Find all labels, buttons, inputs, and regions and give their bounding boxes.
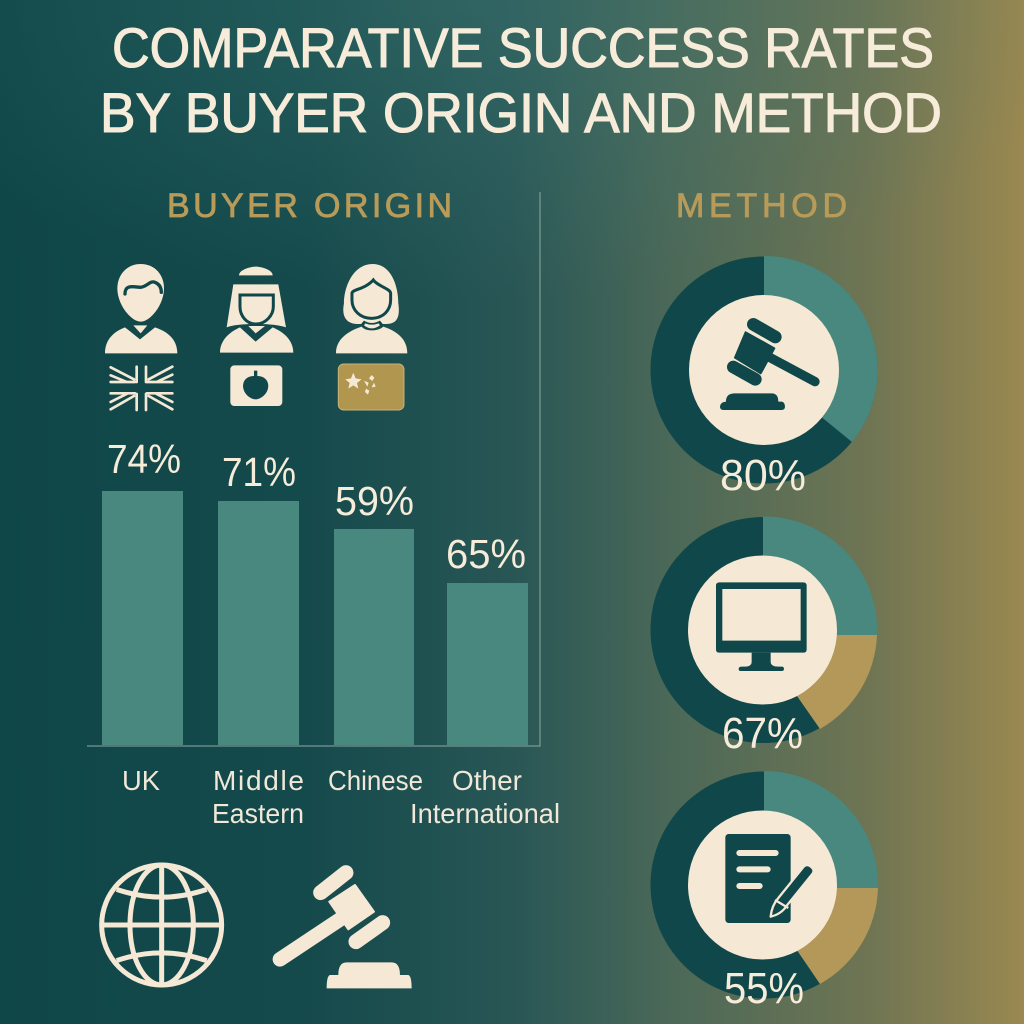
icon: gavel in circle [720, 324, 815, 410]
bar: UK [102, 491, 183, 745]
title: BY BUYER ORIGIN AND METHOD [100, 81, 942, 144]
bar values: 71% [222, 449, 296, 495]
bar category labels [122, 765, 560, 829]
donut: auction 80% [650, 256, 878, 500]
bar category labels: Eastern [212, 798, 304, 829]
bar category labels: UK [122, 765, 160, 796]
icon: Chinese flag [338, 364, 404, 410]
bar: Middle Eastern [218, 501, 299, 745]
icon: Chinese buyer [336, 264, 407, 353]
bar: Chinese [334, 529, 414, 745]
bar: Other International [447, 583, 528, 745]
icon: Middle Eastern flag [230, 365, 282, 406]
bar values: 65% [446, 531, 526, 577]
bar category labels: Chinese [328, 765, 423, 796]
icon: document and pen [725, 834, 814, 923]
icon: globe [102, 865, 222, 985]
icon: UK flag [111, 367, 172, 410]
heading: method: METHOD [676, 187, 847, 225]
bar category labels: International [410, 798, 560, 829]
value: 67% [722, 709, 803, 758]
title: COMPARATIVE SUCCESS RATES [112, 16, 934, 79]
bar values: 74% [107, 436, 181, 482]
icon: UK buyer [105, 264, 177, 353]
heading: buyer origin: BUYER ORIGIN [167, 187, 452, 225]
icon: Middle Eastern buyer [220, 267, 293, 353]
chart axes [87, 192, 540, 746]
bar category labels: Other [452, 765, 522, 796]
donut: private treaty 55% [650, 771, 878, 1013]
bar chart: buyer origin [102, 491, 528, 745]
donut: online 67% [650, 516, 877, 758]
value: 80% [720, 451, 806, 500]
icon: monitor [716, 582, 807, 671]
bar values [107, 436, 526, 577]
title [100, 16, 942, 144]
bar values: 59% [335, 478, 414, 524]
icon: gavel [280, 873, 412, 988]
bar category labels: Middle [213, 765, 304, 796]
value: 55% [724, 964, 804, 1013]
